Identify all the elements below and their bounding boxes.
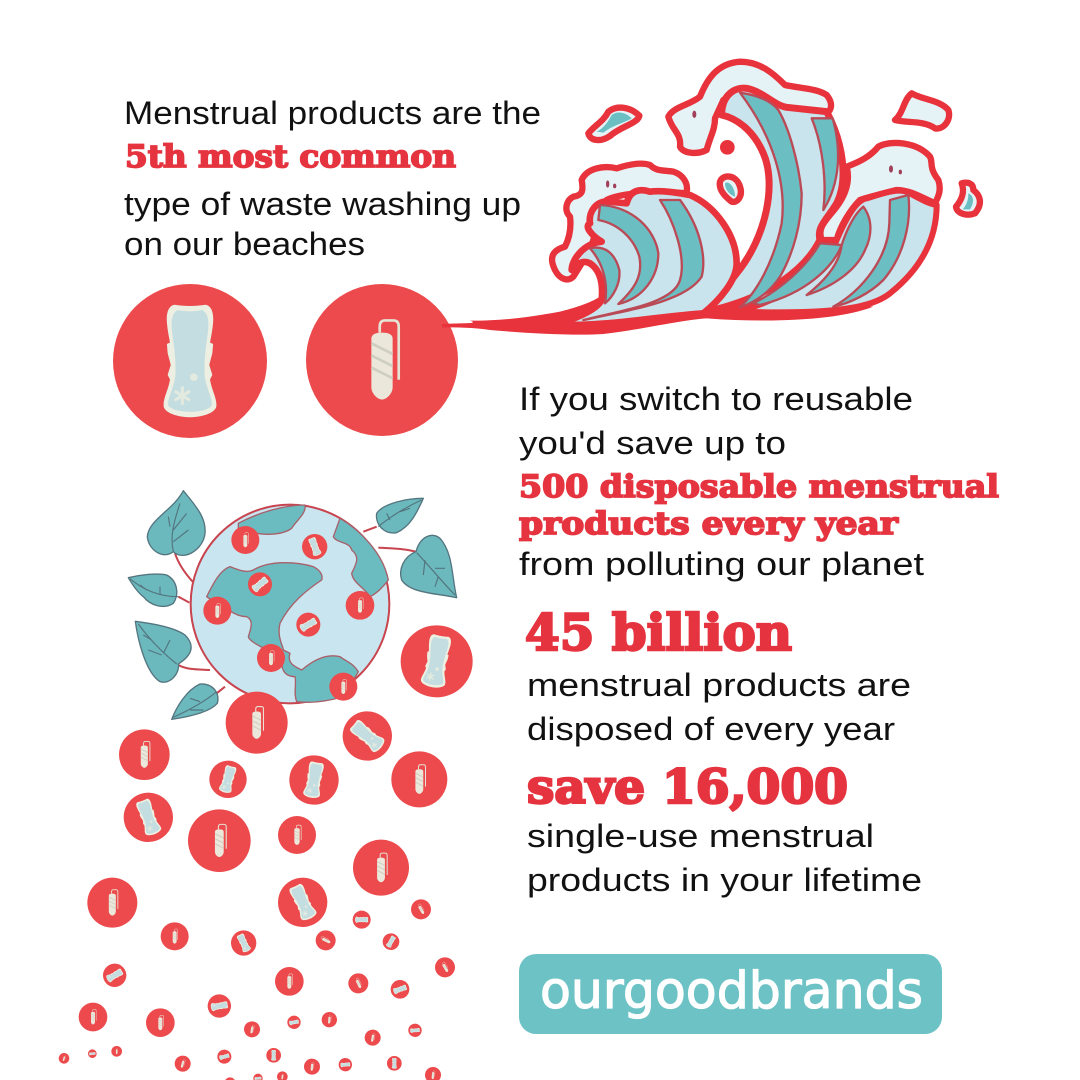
illustration: globe with leaves — [128, 491, 478, 719]
big number: 45 billion — [525, 603, 792, 662]
text line: menstrual products are — [527, 667, 911, 703]
statistic: save 16,000 — [527, 760, 922, 898]
right wave body — [737, 191, 937, 312]
falling product circles — [57, 692, 459, 1080]
center wave body — [707, 88, 843, 312]
logo: ourgoodbrands: ourgoodbrands — [540, 962, 923, 1021]
globe product circles — [203, 526, 374, 701]
center wave bands — [740, 93, 842, 307]
center wave foam — [668, 62, 831, 153]
text line: from polluting our planet — [519, 546, 924, 582]
text line: disposed of every year — [527, 711, 895, 747]
text line: If you switch to reusable — [519, 381, 913, 417]
leaves — [128, 491, 457, 719]
highlighted heading: every year: products every year — [519, 506, 899, 542]
left wave body — [553, 190, 737, 325]
logo: ourgoodbrands — [519, 954, 942, 1034]
highlighted heading: 500 products: 500 disposable menstrual — [519, 469, 999, 505]
text line: on our beaches — [124, 226, 365, 262]
spray droplets — [588, 93, 980, 215]
text line: type of waste washing up — [124, 186, 521, 222]
text block: beach waste — [124, 95, 541, 262]
right wave foam — [820, 143, 940, 240]
left wave foam — [552, 164, 687, 279]
foam dots — [606, 111, 902, 188]
text block: switch to reusable — [519, 381, 999, 582]
highlighted heading: 5th most common: 5th most common — [125, 139, 456, 175]
large pad circle — [395, 620, 478, 703]
text line: Menstrual products are the — [124, 95, 541, 131]
text line: you'd save up to — [519, 425, 786, 461]
leaf stems — [175, 527, 416, 693]
icon: tampon in red circle — [306, 284, 458, 436]
right wave bands — [807, 195, 909, 307]
continents — [207, 505, 388, 702]
text line: products in your lifetime — [527, 862, 922, 898]
wave tail — [442, 297, 873, 335]
text line: single-use menstrual — [527, 818, 874, 854]
left wave bands — [583, 200, 703, 320]
globe — [191, 505, 389, 703]
illustration: ocean wave — [442, 62, 980, 335]
statistic: 45 billion — [525, 603, 911, 747]
big number: save 16,000 — [527, 760, 848, 815]
icon: pad in red circle — [113, 284, 267, 438]
